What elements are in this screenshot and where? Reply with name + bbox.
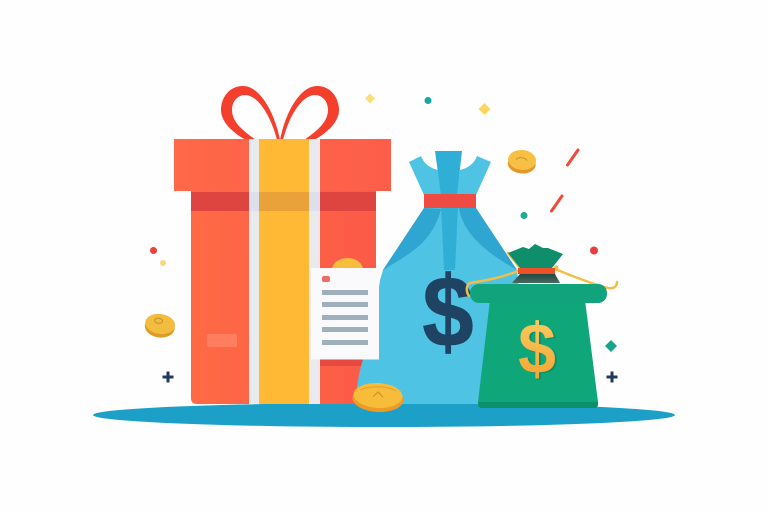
coin: bottom front bbox=[352, 382, 404, 413]
green neck lower bbox=[512, 274, 560, 283]
paper text lines bbox=[322, 290, 368, 345]
bag neck centre bbox=[435, 151, 462, 195]
box label patch bbox=[207, 334, 237, 347]
gold straps bbox=[467, 253, 617, 296]
bow bbox=[221, 86, 339, 140]
large blue money bag bbox=[356, 151, 530, 404]
bag body bbox=[356, 208, 530, 404]
gold dollar sign: $ bbox=[518, 309, 556, 389]
teal dot top bbox=[424, 97, 432, 104]
red slash upper bbox=[568, 150, 578, 165]
gold dollar shadow: $ bbox=[520, 310, 558, 390]
paper shadow on box bbox=[320, 360, 363, 366]
bag neck left flap bbox=[409, 156, 442, 195]
green crown bbox=[508, 244, 563, 268]
paper red mark bbox=[322, 276, 330, 282]
teal dot right bbox=[520, 212, 528, 219]
bag neck right flap bbox=[456, 156, 491, 195]
ribbon bbox=[249, 139, 320, 404]
big dollar sign: $ bbox=[422, 257, 474, 368]
coin: left bbox=[143, 312, 176, 339]
red slash lower bbox=[552, 196, 562, 211]
gift box bbox=[174, 86, 391, 404]
lid bbox=[174, 139, 391, 191]
green money bag bbox=[467, 244, 617, 408]
red dot right bbox=[590, 246, 598, 254]
box shadow band bbox=[191, 192, 376, 211]
yellow diamond top bbox=[365, 94, 375, 104]
bag centre strip bbox=[441, 205, 458, 270]
yellow dot left bbox=[160, 260, 166, 266]
green bag base bbox=[478, 402, 598, 408]
coin behind document bbox=[332, 258, 363, 282]
bag left fold bbox=[383, 208, 441, 270]
gold strap dot bbox=[554, 266, 558, 270]
bag tie bbox=[424, 194, 476, 208]
document with coin bbox=[311, 258, 379, 366]
ground ellipse bbox=[93, 403, 675, 427]
navy plus left bbox=[162, 372, 174, 382]
confetti decorations bbox=[150, 94, 618, 382]
box body bbox=[191, 191, 376, 404]
green bag tie bbox=[518, 268, 555, 274]
green bag brim bbox=[470, 284, 607, 303]
paper bbox=[311, 268, 379, 360]
bag right fold bbox=[459, 208, 517, 270]
red dot left bbox=[150, 247, 157, 254]
coin: upper right bbox=[507, 149, 537, 175]
yellow diamond right bbox=[478, 103, 490, 115]
teal diamond right bbox=[605, 340, 617, 352]
navy plus right bbox=[606, 372, 618, 382]
green bag body bbox=[478, 300, 598, 408]
